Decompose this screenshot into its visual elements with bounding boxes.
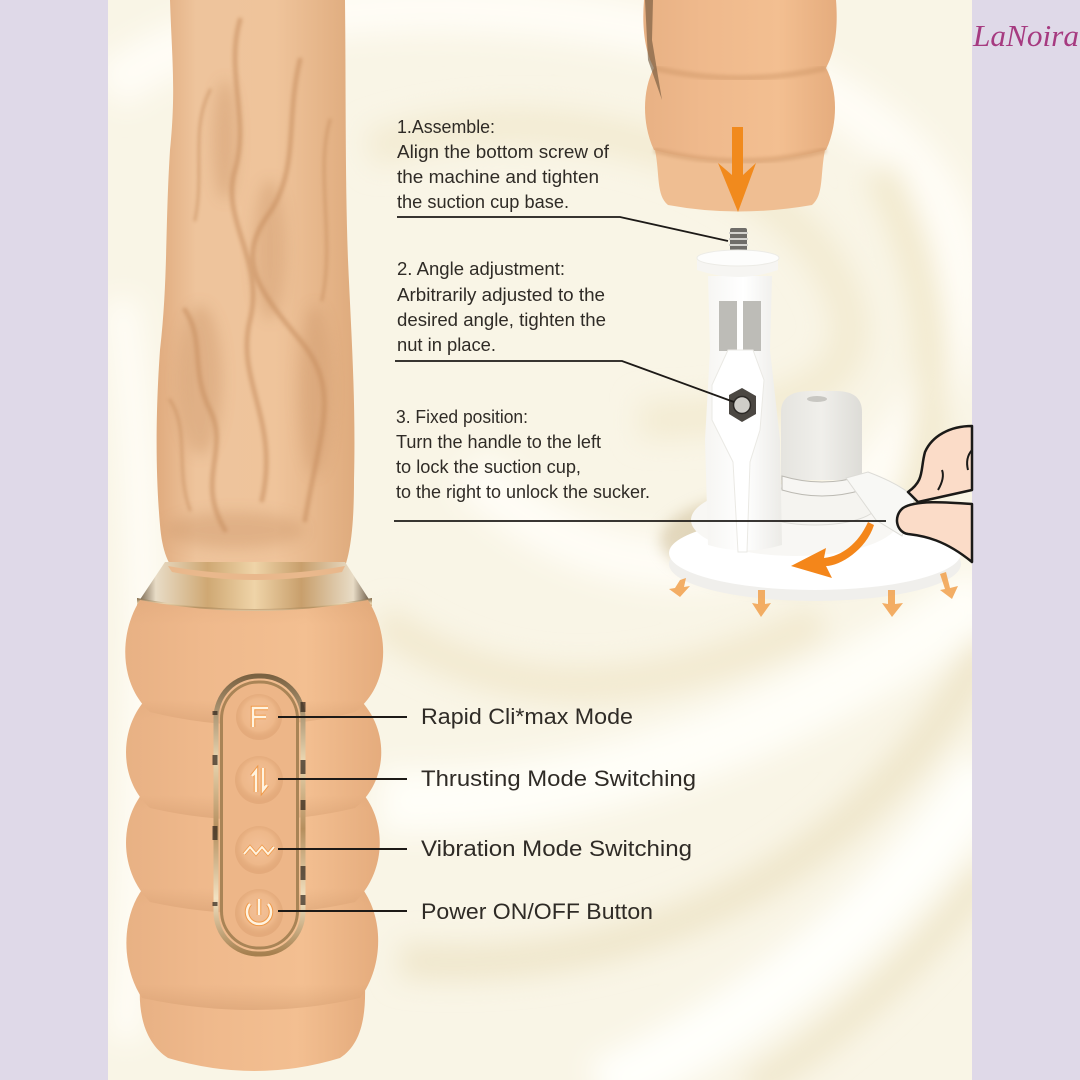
- bottom cap: [140, 985, 365, 1071]
- arm: [705, 276, 782, 552]
- shadow: [660, 490, 940, 590]
- text: step 3: to lock the suction cup,: [396, 456, 581, 477]
- control panel: [215, 676, 303, 954]
- logo: LaNoira: [972, 18, 1079, 53]
- lobe 3: [126, 785, 380, 914]
- knob: [697, 250, 779, 277]
- callout: thrusting mode: Thrusting Mode Switching: [421, 766, 696, 791]
- icon: down arrow: [718, 127, 756, 212]
- text: step 1: the machine and tighten: [397, 166, 599, 187]
- button: rapid mode: [236, 694, 282, 740]
- text: step 2: [397, 258, 606, 355]
- text: step 3: [396, 406, 650, 502]
- text: step 1: the suction cup base.: [397, 191, 569, 212]
- product shaft: [157, 0, 354, 578]
- text: step 1: 1.Assemble:: [397, 116, 495, 137]
- suction mount: [660, 228, 961, 617]
- button: vibration: [235, 826, 283, 874]
- callout: rapid mode: Rapid Cli*max Mode: [421, 704, 633, 729]
- callout: vibration mode: Vibration Mode Switching: [421, 836, 692, 861]
- text: step 2: desired angle, tighten the: [397, 309, 606, 330]
- lobe 1: [125, 600, 383, 725]
- text: step 3: Turn the handle to the left: [396, 431, 601, 452]
- callout: power button: Power ON/OFF Button: [421, 899, 653, 924]
- icon: rotate arrow: [791, 522, 874, 578]
- button: thrusting: [235, 756, 283, 804]
- handle body: [125, 600, 383, 1071]
- lobe 4: [126, 880, 378, 1010]
- gold collar: [137, 562, 372, 616]
- text: step 3: to the right to unlock the sucker.: [396, 481, 650, 502]
- upper machine section: [643, 0, 837, 212]
- text: step 1: Align the bottom screw of: [397, 141, 610, 162]
- callout line: step 1: [397, 217, 728, 241]
- icon: fingers: [897, 426, 972, 562]
- text: step 1: [397, 116, 610, 212]
- callout line: step 3: [394, 520, 886, 522]
- cylinder: [781, 391, 862, 496]
- button: power: [235, 889, 283, 937]
- icon: suction arrows: [669, 572, 958, 617]
- handle lever: [846, 472, 915, 536]
- suction base: [669, 484, 961, 601]
- screw: [729, 228, 748, 256]
- text: step 2: nut in place.: [397, 334, 496, 355]
- text: step 2: Arbitrarily adjusted to the: [397, 284, 605, 305]
- callout line: step 2: [395, 361, 734, 402]
- lobe 2: [126, 695, 381, 820]
- text: step 2: 2. Angle adjustment:: [397, 258, 565, 279]
- text: step 3: 3. Fixed position:: [396, 406, 528, 427]
